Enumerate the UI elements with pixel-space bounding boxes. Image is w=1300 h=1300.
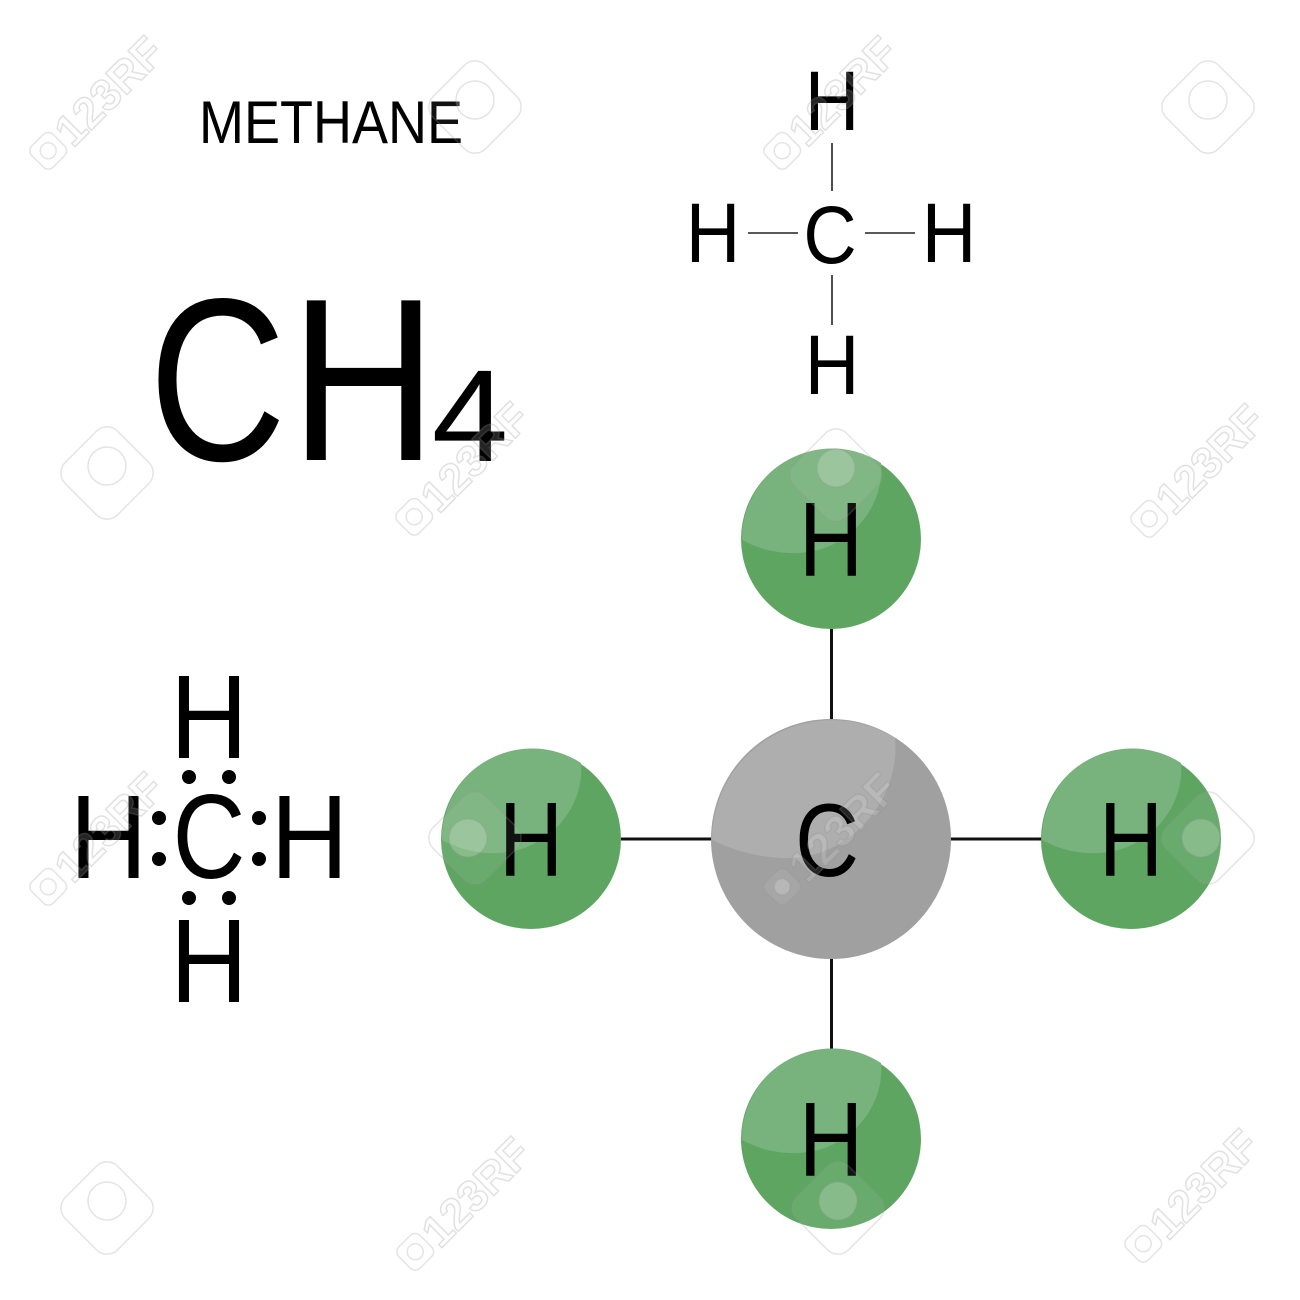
watermark stamps: 123RF [1146,396,1274,524]
atom: hydrogen right: H [1099,780,1163,899]
atom: hydrogen left [441,748,621,929]
atom: hydrogen top: H [799,480,863,599]
atom: hydrogen left: H [499,780,563,899]
atom: hydrogen right [1041,748,1221,929]
watermark stamps: 123RF [412,1129,540,1257]
atom: hydrogen bottom [741,1048,921,1229]
watermark stamps: 123RF [779,28,907,156]
chemical formula CH4 [149,250,508,510]
watermark stamps: 123RF [1140,1121,1268,1249]
bonds between atoms [621,629,1042,1049]
Lewis dot structure: C [173,771,245,904]
atom: carbon centre: C [795,783,859,899]
title: METHANE: METHANE [199,89,463,156]
watermark stamps: 123RF [411,394,539,522]
Lewis dot structure [70,651,348,1028]
Lewis dot structure: H [271,771,348,904]
atom: carbon centre [711,719,951,959]
chemical formula CH4: 4 [432,343,508,489]
ball-and-stick molecule model [441,448,1221,1229]
structural formula [686,54,976,412]
structural formula: H [922,186,976,280]
atom: hydrogen bottom: H [799,1080,863,1199]
Lewis dot structure: H [170,651,248,784]
chemical formula CH4: C [149,250,286,509]
watermark stamps: 123RF [45,764,173,892]
chemical formula CH4: H [290,251,437,510]
structural formula: H [805,54,859,148]
Lewis dot structure: H [70,771,147,904]
watermark stamps: 123RF [779,764,907,892]
Lewis dot structure: H [170,895,248,1028]
structural formula: C [803,188,857,281]
structural formula: H [805,318,859,412]
structural formula: H [686,186,740,280]
atom: hydrogen top [741,448,921,629]
watermark stamps: 123RF [45,28,173,156]
